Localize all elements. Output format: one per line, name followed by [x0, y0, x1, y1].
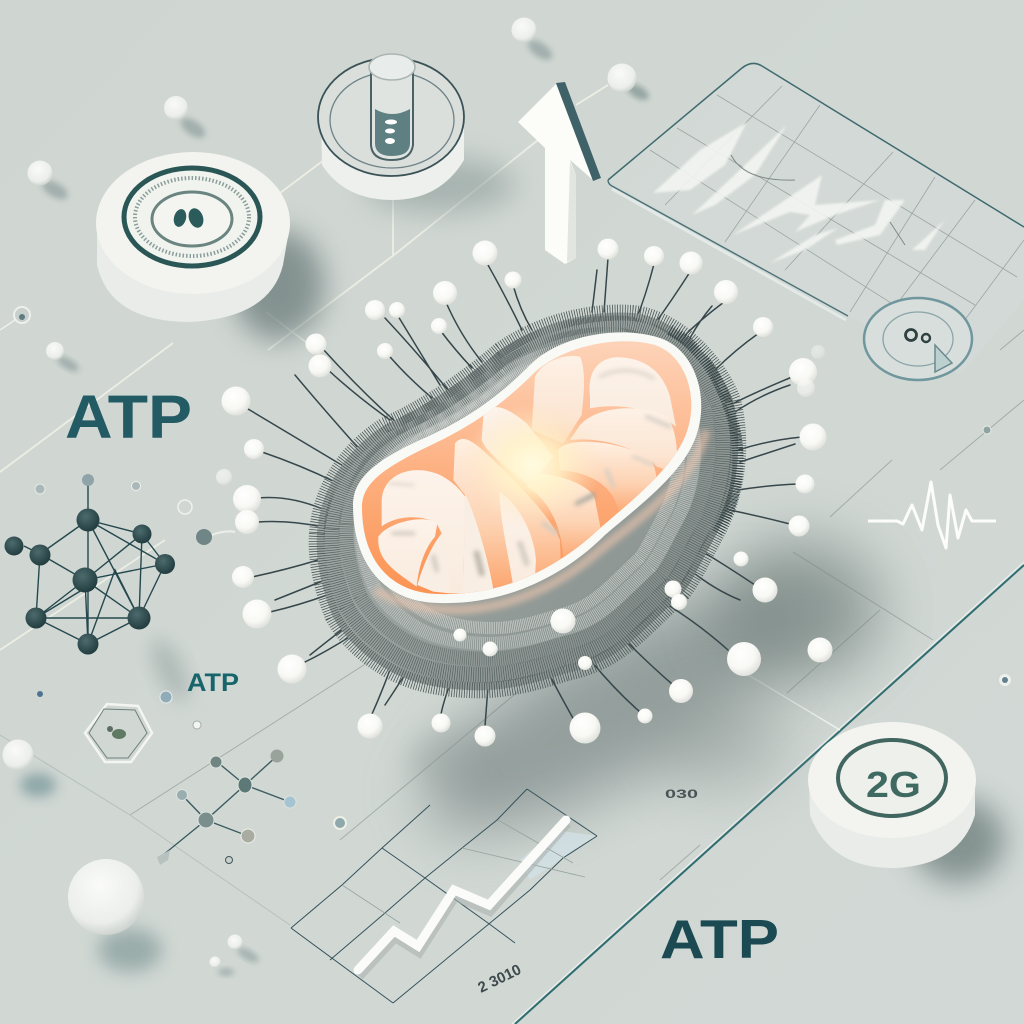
outer membrane: [317, 313, 738, 690]
mitochondrion: [317, 313, 738, 690]
icon: hexagon: [85, 704, 152, 762]
puck: 2G dial bottom right: 2G: [866, 764, 921, 805]
dark right edge: [670, 330, 738, 533]
fur: second row: [331, 323, 723, 675]
white rim: [353, 332, 701, 603]
fur: outer hairs: [317, 313, 738, 690]
axis label: 2 3010: [475, 961, 524, 997]
white energy balls: [216, 238, 832, 746]
puck: 2G dial bottom right: [808, 722, 1004, 882]
icon: white up arrow: [518, 82, 601, 264]
rising trace: [653, 122, 950, 263]
small number label: 030: [665, 789, 698, 801]
puck: target dial top left: [96, 152, 324, 340]
chart: rising line bottom: [291, 789, 597, 1003]
molecule: network left: [4, 474, 235, 654]
fur: inner row: [376, 356, 679, 628]
panel: line chart sheet top right: [608, 63, 1024, 375]
icon: test tube: [369, 54, 415, 160]
label: small ATP: ATP: [187, 669, 239, 697]
text ring: [135, 178, 249, 256]
connecting thin lines: [0, 312, 307, 343]
icon: glass dial right: [864, 298, 972, 380]
cristae folds: [378, 356, 677, 593]
puck: test tube dial: [318, 54, 515, 213]
molecule: small lower left: [37, 691, 346, 865]
spines: [248, 258, 802, 726]
shadow beneath mitochondrion: [143, 540, 880, 876]
label: large ATP bottom: ATP: [660, 908, 779, 970]
central glow: [462, 403, 602, 527]
orange interior: [362, 341, 691, 594]
fur: third row: [346, 334, 709, 659]
peach sheen: [375, 430, 706, 610]
fold shading: [390, 370, 670, 573]
fur: fourth row: [361, 345, 694, 644]
icon: ECG pulse: [868, 482, 996, 548]
chart line: [359, 823, 567, 976]
label: large ATP left: ATP: [65, 383, 192, 451]
